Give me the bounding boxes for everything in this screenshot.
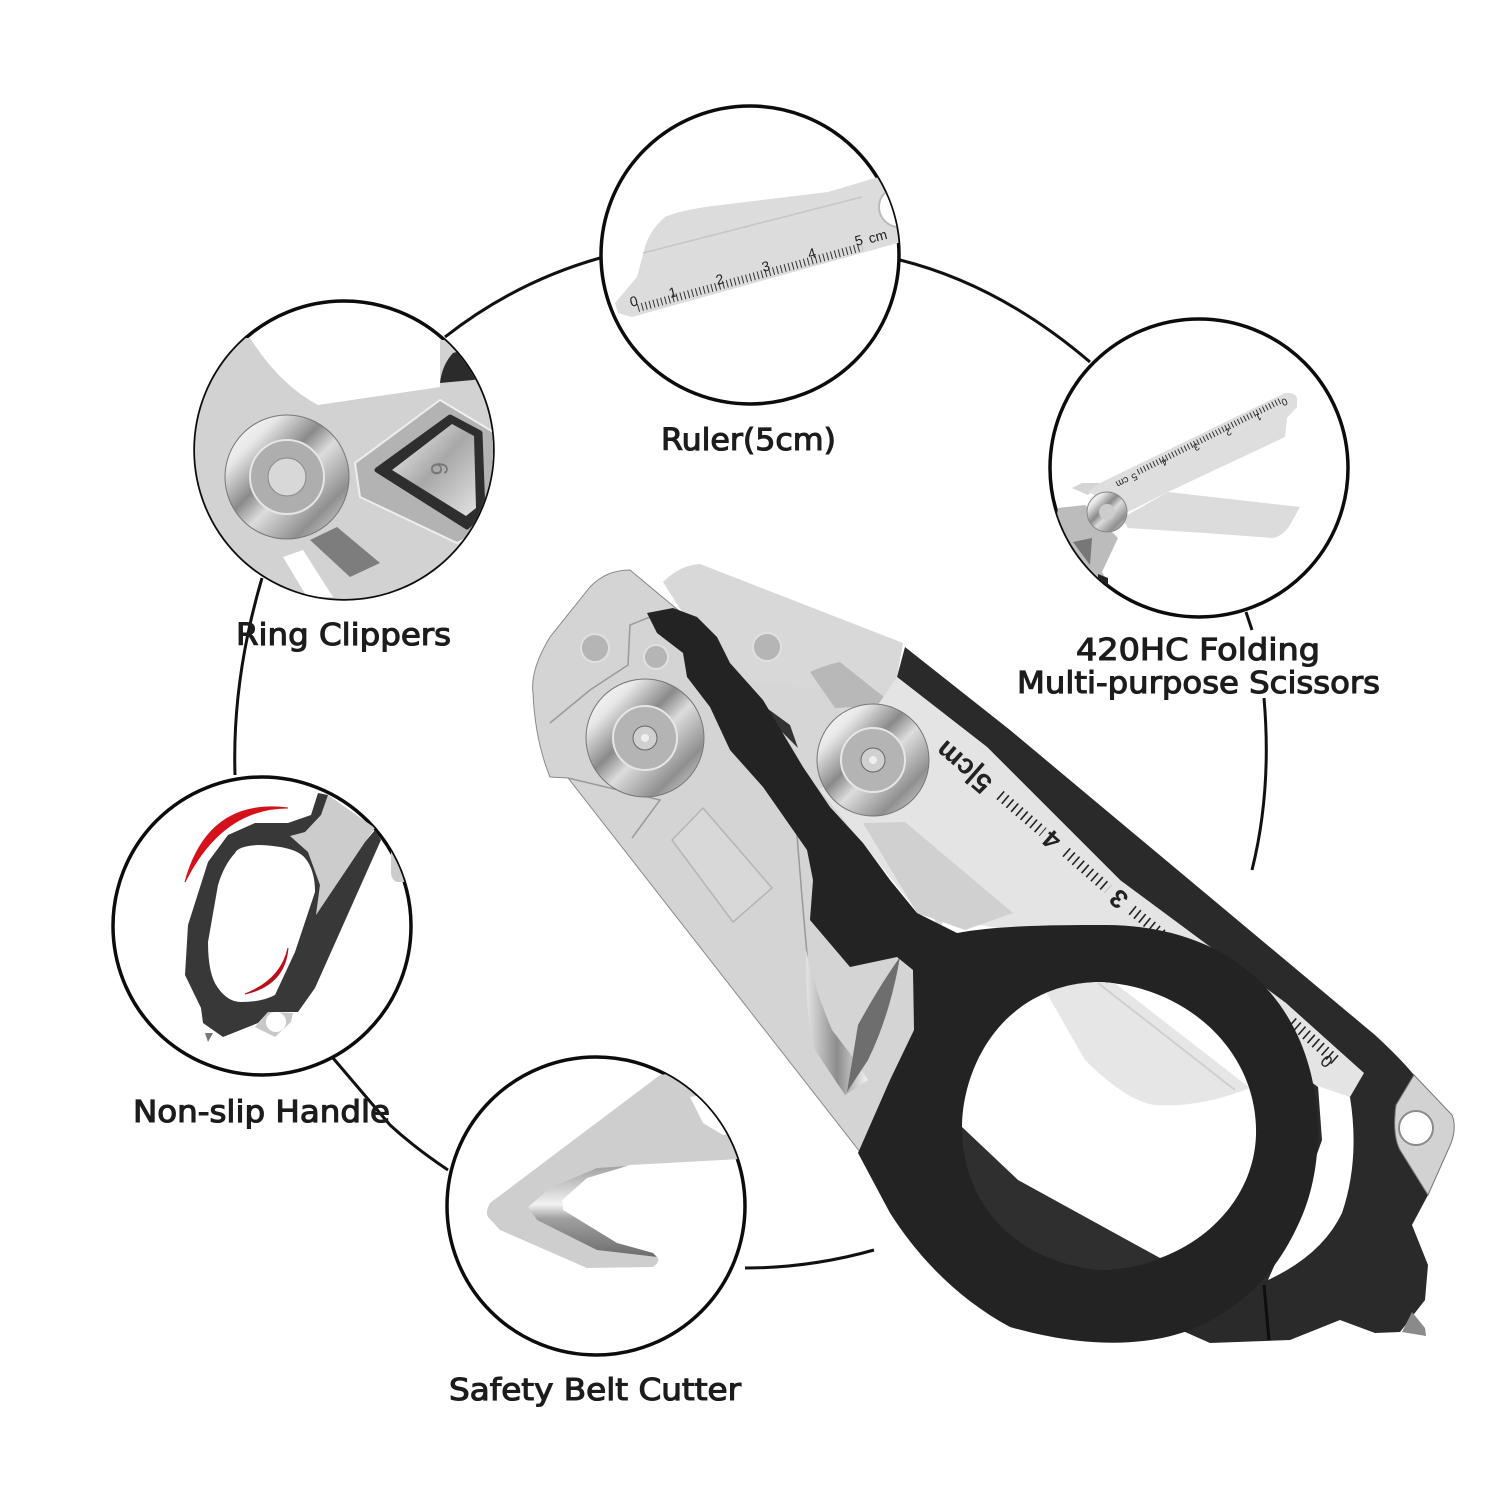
hook dark wedge bbox=[847, 957, 900, 1092]
glass breaker tip bbox=[1402, 1312, 1426, 1336]
detail circle: folding scissors: cm bbox=[1114, 473, 1131, 489]
lanyard tab bbox=[1395, 1075, 1454, 1195]
liner outline bbox=[550, 617, 660, 838]
handle seam bbox=[1264, 1285, 1269, 1340]
rivets bbox=[581, 633, 781, 669]
large pivot screw bbox=[586, 679, 704, 797]
ruler numbers bbox=[929, 735, 1337, 1071]
detail circle: safety belt cutter bbox=[447, 1057, 760, 1355]
detail circle: ruler: 3 bbox=[760, 257, 772, 275]
ruler numbers: 4 bbox=[1036, 824, 1067, 856]
dark slot bbox=[764, 706, 798, 748]
detail circle: ruler: 0 bbox=[628, 292, 640, 310]
upper plate bbox=[663, 564, 1000, 930]
black lever and ring handle bbox=[647, 608, 1318, 1343]
detail circle: folding scissors: 0 bbox=[1279, 395, 1289, 408]
detail circle: ring clippers: 6 bbox=[425, 462, 452, 475]
detail circle: ruler: 2 bbox=[714, 270, 726, 288]
main tool: folding rescue scissors bbox=[533, 564, 1454, 1343]
ruler ticks bbox=[1000, 795, 1335, 1060]
detail circle: folding scissors: 5 bbox=[1129, 470, 1139, 483]
spine and rear handle bbox=[897, 647, 1428, 1343]
hook bevel bbox=[806, 950, 868, 1095]
detail circle: folding scissors: 3 bbox=[1191, 440, 1201, 453]
detail circle: folding scissors: 2 bbox=[1223, 425, 1233, 438]
detail circle: ruler: 1 bbox=[667, 283, 679, 301]
rear handle inside hole bbox=[962, 1127, 1250, 1270]
detail circle: non-slip handle bbox=[113, 777, 416, 1075]
silver back plate bbox=[533, 570, 916, 1152]
lower blade band bbox=[863, 822, 1013, 930]
label: folding scissors: 420HC Folding bbox=[1076, 633, 1320, 668]
connecting ring arc bbox=[235, 258, 1266, 1268]
ruler numbers: 5|cm bbox=[929, 735, 998, 800]
detail circle: ruler: 4 bbox=[806, 244, 818, 262]
ruler numbers: 0 bbox=[1317, 1051, 1337, 1071]
detail circle: ruler: 5 bbox=[853, 231, 865, 249]
label: safety belt cutter: Safety Belt Cutter bbox=[449, 1373, 742, 1408]
label: ring clippers: Ring Clippers bbox=[236, 618, 451, 653]
detail circle: folding scissors bbox=[1050, 319, 1348, 617]
small pivot screw bbox=[817, 704, 929, 816]
label: folding scissors bbox=[1017, 633, 1380, 701]
detail circle: ring clippers bbox=[190, 301, 500, 610]
finger hole bbox=[962, 982, 1256, 1258]
label: folding scissors: Multi-purpose Scissors bbox=[1017, 666, 1380, 701]
plate patch behind lever bbox=[740, 680, 885, 860]
detail circle: ruler bbox=[601, 106, 919, 404]
hook edge line bbox=[797, 835, 812, 1010]
detail circle: ruler: cm bbox=[867, 226, 889, 246]
ruler numbers: 3 bbox=[1103, 883, 1134, 915]
detail circle: folding scissors: 1 bbox=[1253, 410, 1263, 423]
plate cutout bbox=[672, 808, 772, 922]
lanyard hole bbox=[1399, 1111, 1433, 1145]
plate liner and gray bar bbox=[810, 662, 895, 708]
ruler blade bbox=[820, 677, 1364, 1097]
label: ruler: Ruler(5cm) bbox=[661, 423, 836, 458]
crescent gap bbox=[1268, 1086, 1354, 1280]
detail circle: folding scissors: 4 bbox=[1159, 455, 1169, 468]
label: non-slip handle: Non-slip Handle bbox=[133, 1095, 390, 1130]
blade through hole bbox=[1046, 982, 1250, 1106]
